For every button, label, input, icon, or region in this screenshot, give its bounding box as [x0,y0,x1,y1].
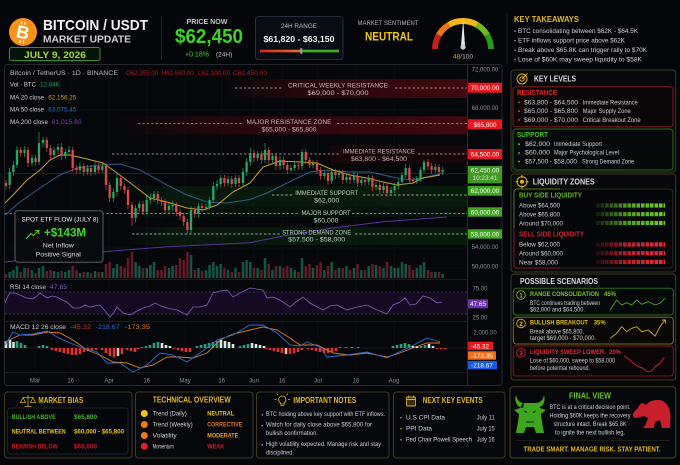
panel: price chart [4,64,502,386]
title: BITCOIN / USDT [43,17,148,34]
panel: important notes: bullish confirmation. [266,430,318,437]
panel: next key events: July 16 [477,436,495,443]
price now [175,19,243,58]
price axis: 2,000.00 [473,330,497,336]
zone: critical weekly resistance [225,79,467,98]
icon: bull [514,395,546,433]
panel: final view: structure intact. Break $65.8K [554,421,627,428]
panel: important notes: High volatility expected. Manage risk and stay [266,441,382,448]
panel: key takeaways: ETF inflows support price above $62K [518,38,626,44]
time axis: Apr [104,379,114,385]
support levels: $60,000 [525,150,550,157]
volume bars [6,252,443,278]
support labels: MAJOR SUPPORT [302,210,350,217]
support levels: Major Psychological Level [554,150,619,157]
time axis: 16 [218,379,226,385]
sentiment gauge: 48/100 [453,54,473,60]
panel: next key events: July 11 [477,414,495,421]
chart legend: 62,156.25 [48,94,77,101]
panel: final view: BTC is at a critical decision point. [550,404,631,411]
scenario 3: LIQUIDITY SWEEP LOWER [530,349,604,356]
24h range card: 24H RANGE [281,23,318,30]
buy side liquidity: Above $65,800 [519,211,560,218]
price axis: 62,000.00 [471,188,500,195]
chart legend: Bitcoin / TetherUS · 1D · BINANCE [10,70,118,77]
time axis: May [179,379,191,385]
panel: important notes: Watch for daily close above $65,800 for [266,422,372,429]
icon: target [517,74,528,84]
price now: +0.18% [185,52,209,58]
scenario 3: before potential rebound. [530,365,590,372]
panel: technical overview: Volatility [153,433,177,440]
chart legend: C62,450.00 [233,71,268,77]
scenario 1: 1 [519,292,523,299]
zone: major resistance [113,116,467,134]
sell side liquidity: Below $62,000 [519,242,560,249]
moving average 50 [5,164,443,215]
market sentiment: NEUTRAL [365,32,413,44]
panel: next key events: July 15 [477,425,495,432]
panel: final view: FINAL VIEW [569,391,611,400]
chart legend: MA 50 close [10,107,44,114]
scenario 3: 20% [609,349,621,356]
panel: technical overview: WEAK [207,443,225,450]
zone: major resistance: $65,000 - $65,800 [262,126,317,134]
date badge [10,48,100,61]
callout: spot ETF flow: Positive Signal [36,252,81,259]
scenario 1 [513,288,673,315]
market sentiment [358,20,419,44]
panel: market bias: MARKET BIAS [38,396,84,405]
panel: technical overview [136,392,253,458]
sell side liquidity [519,231,665,266]
zone: support bands [5,186,467,245]
price now: (24H) [216,52,232,58]
support levels: $57,500 - $58,000 [525,158,577,165]
candlesticks [6,132,443,233]
panel: next key events: NEXT KEY EVENTS [423,396,483,405]
callout: spot ETF flow: SPOT ETF FLOW (JULY 8) [22,217,98,224]
panel: technical overview: CORRECTIVE [207,421,243,428]
24h range card: $61,820 - $63,150 [264,34,335,44]
panel: next key events: Fed Chair Powell Speech [406,436,472,443]
panel: important notes: disciplined. [266,449,294,456]
panel: technical overview: Trend (Weekly) [153,421,193,428]
scenario 3: Lose of $60,000, sweep to $58,000 [530,358,615,365]
chart legend [10,70,268,126]
panel: key takeaways: Break above $65.8K can trigger rally to $70K [518,47,648,54]
panel: key takeaways: KEY TAKEAWAYS [514,15,580,24]
chart legend: L62,100.00 [198,71,231,77]
price axis: 62,450.00 [471,168,500,175]
chart legend: Vol · BTC [10,82,36,89]
price axis [468,68,502,369]
sell side liquidity: SELL SIDE LIQUIDITY [519,231,584,238]
support labels: $57,500 - $58,000 [288,237,346,244]
resistance levels: $69,000 - $70,000 [524,117,578,124]
scenario 3 [513,346,673,376]
subtitle: MARKET UPDATE [43,34,131,46]
price axis: 54,000.00 [472,245,499,251]
market sentiment: MARKET SENTIMENT [358,20,419,27]
panel: final view: TRADE SMART. MANAGE RISK. STAY PATIENT. [524,447,661,454]
chart legend: MA 200 close [10,119,48,126]
icon: bear [633,400,670,428]
sentiment gauge [435,19,491,60]
RSI panel: 47.65 [50,284,67,291]
support levels: Strong Demand Zone [582,158,634,165]
panel: technical overview: TECHNICAL OVERVIEW [153,395,231,404]
price axis: 10:23:41 [473,175,498,182]
scenario 1: RANGE CONSOLIDATION [530,291,599,298]
scenario 1: $62,000 and $64,500. [530,307,585,314]
chart legend: H62,680.00 [162,71,194,77]
moving average 20 [5,155,440,210]
chart legend: 12.84K [40,82,61,89]
price axis: 70,000.00 [471,85,500,92]
buy side liquidity: Around $70,000 [519,220,563,227]
header [9,16,491,61]
panel: key takeaways: BTC consolidating between $62K - $64.5K [518,28,639,35]
support levels: $62,000 [525,141,550,148]
panel: market bias: BULLISH ABOVE [12,414,56,421]
price axis: 50,000.00 [472,264,499,270]
icon: crosshair [516,175,528,188]
time axis: Mar [30,379,40,385]
panel: market bias: $65,800 [74,414,97,421]
support labels: IMMEDIATE SUPPORT [295,190,358,197]
scenario 2: target $69,000 - $70,000. [530,335,596,342]
scenario 1: BTC continues trading between [530,300,600,307]
panel: important notes: IMPORTANT NOTES [293,396,357,405]
price axis: $65,800 [473,122,497,129]
MACD panel [5,324,467,372]
panel: technical overview: Trend (Daily) [153,411,187,418]
price axis: 47.65 [470,301,486,308]
zone: major resistance: MAJOR RESISTANCE ZONE [246,119,332,126]
MACD panel: -45.32 [70,324,92,331]
date badge: JULY 9, 2026 [24,50,86,61]
panel: final view [510,387,676,458]
time axis: 16 [143,379,151,385]
panel: market bias [4,392,132,458]
RSI panel: RSI 14 close [10,284,46,291]
zone: immediate resistance [112,145,467,163]
support levels: SUPPORT [517,132,549,139]
panel: technical overview: Momentum [153,443,174,450]
price axis: 25.00 [472,316,488,322]
scenario 3: 3 [519,350,523,357]
chart legend: MA 20 close [10,94,44,101]
panel: next key events [394,392,505,458]
panel: market bias: BEARISH BELOW [12,443,59,450]
sell side liquidity: Around $60,000 [519,250,563,257]
support labels: STRONG DEMAND ZONE [282,229,352,236]
time axis: 16 [353,379,360,385]
RSI panel [5,284,467,317]
callout: spot ETF flow: +$143M [44,226,86,240]
panel: key levels: KEY LEVELS [534,74,576,84]
panel: liquidity zones: LIQUIDITY ZONES [533,178,595,187]
panel: key takeaways: Lose of $60K may sweep liquidity to $58K [518,56,643,64]
panel: next key events: U.S CPI Data [406,414,445,421]
scenario 2: BULLISH BREAKOUT [530,320,588,327]
icon: calendar [406,396,416,406]
panel: key levels [511,70,676,172]
resistance levels: Immediate Resistance [583,99,638,106]
panel: possible scenarios: POSSIBLE SCENARIOS [520,277,599,286]
resistance levels [513,87,673,127]
icon: bitcoin logo [9,18,37,46]
scenario 2: Break above $65,800, [530,328,584,335]
panel: technical overview: MODERATE [207,433,239,440]
icon: light bulb [274,394,290,406]
panel: market bias: $60,000 [74,443,97,450]
resistance levels: RESISTANCE [517,90,557,97]
time axis: Jul [314,379,322,385]
panel: market bias: $60,000 - $65,800 [74,428,124,435]
scenario 2: 2 [519,321,523,328]
MACD panel: -173.35 [125,324,150,331]
zone: critical weekly resistance: $69,000 - $70,000 [308,90,369,97]
price axis: 58,000.00 [471,232,500,238]
price axis: -218.67 [471,362,493,369]
time axis: Aug [389,379,399,385]
panel: final view: to ignite the next bullish leg. [555,429,625,436]
support levels [513,129,673,170]
panel: liquidity zones [511,174,676,272]
zone: immediate resistance: $63,800 - $64,500 [351,156,407,163]
time axis: 16 [279,379,286,385]
zone: immediate resistance: IMMEDIATE RESISTANCE [343,148,416,155]
price axis: -45.32 [471,343,490,350]
sell side liquidity: Near $58,000 [519,259,558,266]
price axis: 75.00 [472,286,488,292]
MACD panel: MACD 12 26 close [10,324,66,331]
resistance levels: Critical Breakout Zone [583,117,641,124]
chart legend: 61,015.80 [52,119,82,126]
moving average 200 [5,217,447,262]
price axis: 72,000.00 [472,68,499,74]
price axis: -173.35 [471,353,493,360]
buy side liquidity: BUY SIDE LIQUIDITY [519,193,582,200]
resistance levels: $63,800 - $64,500 [524,99,578,106]
time axis: 16 [67,379,75,385]
callout: spot ETF flow [15,211,103,262]
support labels [282,190,358,244]
icon: scales [20,395,36,406]
scenario 2: 35% [594,320,606,327]
chart legend: O62,355.00 [126,71,159,77]
scenario 1: 45% [604,291,616,298]
buy side liquidity: Above $64,500 [519,203,560,210]
price axis: 64,500.00 [471,152,500,158]
icon: up arrow [26,230,39,239]
resistance levels: Major Supply Zone [583,108,631,115]
panel: market bias: NEUTRAL BETWEEN [12,428,66,435]
panel: important notes: BTC holding above key support with ETF inflows. [266,411,385,418]
resistance levels: $65,000 - $65,800 [524,108,578,115]
24h range card [256,16,343,60]
buy side liquidity [519,193,665,227]
time axis: Jun [249,379,259,385]
scenario 2 [513,317,673,344]
panel: final view: Holding $60K keeps the recovery [550,413,631,420]
panel: next key events: PPI Data [406,425,432,432]
zone: critical weekly resistance: CRITICAL WEEKLY RESISTANCE [288,82,389,89]
support levels: Immediate Support [554,141,602,148]
panel: key takeaways [507,13,648,64]
support labels: $60,000 [314,217,339,224]
panel: technical overview: NEUTRAL [207,411,234,418]
price axis: 60,000.00 [471,210,500,216]
MACD panel: -218.67 [96,324,120,331]
price axis: 68,000.00 [472,106,499,112]
price now: $62,450 [175,26,243,48]
support labels: $62,000 [314,198,340,205]
callout: spot ETF flow: Net Inflow [43,243,74,250]
panel: possible scenarios [511,274,676,380]
price now: PRICE NOW [186,19,228,26]
time axis [30,379,399,385]
icon: bitcoin logo: B [14,21,31,44]
chart legend: 63,075.45 [48,107,77,114]
panel: important notes [256,392,389,458]
